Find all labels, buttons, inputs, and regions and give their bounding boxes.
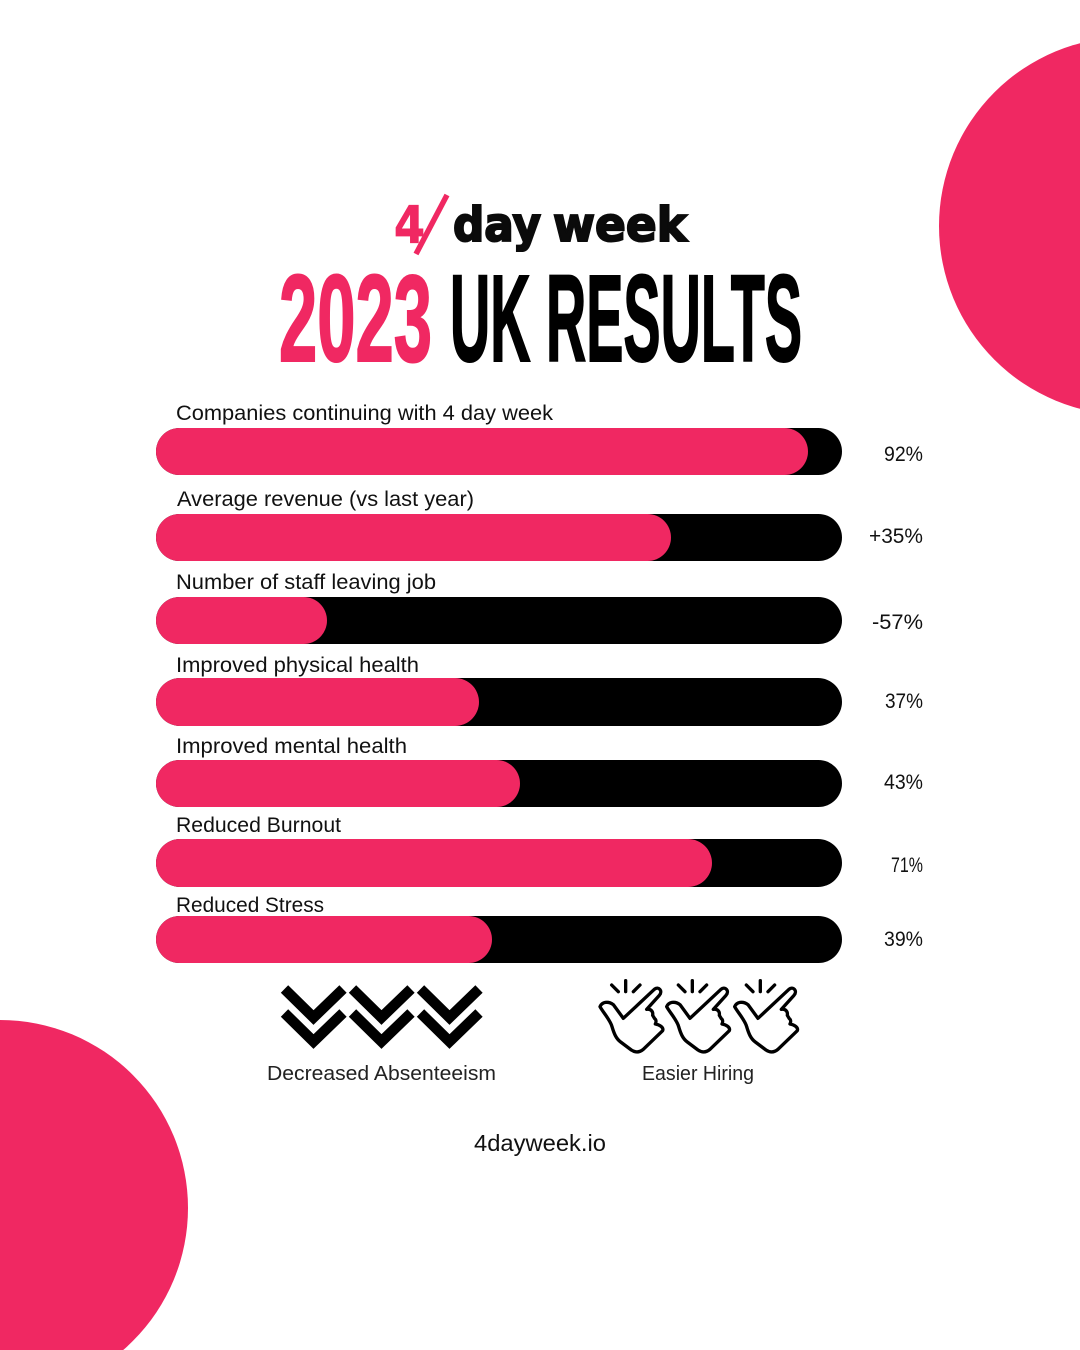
decorative circle: top right — [939, 37, 1080, 415]
caption: easier hiring: Easier Hiring — [642, 1062, 754, 1085]
bar row: reduced burnout — [156, 814, 923, 887]
logo: 4/day week: 4 — [394, 196, 425, 256]
bar row: companies continuing — [156, 402, 923, 475]
logo: 4/day week — [394, 195, 689, 256]
bar row: physical health: 37% — [885, 690, 923, 713]
title: 2023 UK RESULTS — [279, 251, 802, 388]
bar row: staff leaving — [156, 571, 923, 644]
bar row: reduced stress: Reduced Stress — [176, 894, 324, 917]
bar row: average revenue — [156, 488, 923, 561]
logo: 4/day week: week — [553, 198, 689, 253]
decorative circle: bottom left — [0, 1020, 188, 1350]
website url: 4dayweek.io — [474, 1130, 606, 1156]
bar row: mental health: Improved mental health — [176, 735, 407, 758]
bar row: mental health — [156, 735, 923, 807]
bar row: reduced burnout: Reduced Burnout — [176, 814, 341, 837]
title: 2023 UK RESULTS: 2023 — [279, 251, 432, 388]
logo: 4/day week: day — [453, 198, 541, 253]
icon: three pointing hands — [600, 981, 798, 1052]
bar row: average revenue: Average revenue (vs last year) — [177, 488, 474, 511]
bar row: physical health — [156, 654, 923, 726]
bar row: companies continuing: 92% — [884, 443, 923, 466]
bar row: mental health: 43% — [884, 771, 923, 794]
bar row: physical health: Improved physical health — [176, 654, 419, 677]
bar row: companies continuing: Companies continuing with 4 day week — [176, 402, 554, 425]
bar row: reduced stress — [156, 894, 923, 963]
icon: triple down chevrons — [284, 989, 479, 1042]
bar row: staff leaving: -57% — [872, 611, 923, 634]
caption: decreased absenteeism: Decreased Absenteeism — [267, 1062, 496, 1085]
bar row: reduced stress: 39% — [884, 928, 923, 951]
bar row: reduced burnout: 71% — [891, 854, 923, 877]
bar row: staff leaving: Number of staff leaving job — [176, 571, 436, 594]
bar row: average revenue: +35% — [869, 525, 923, 548]
